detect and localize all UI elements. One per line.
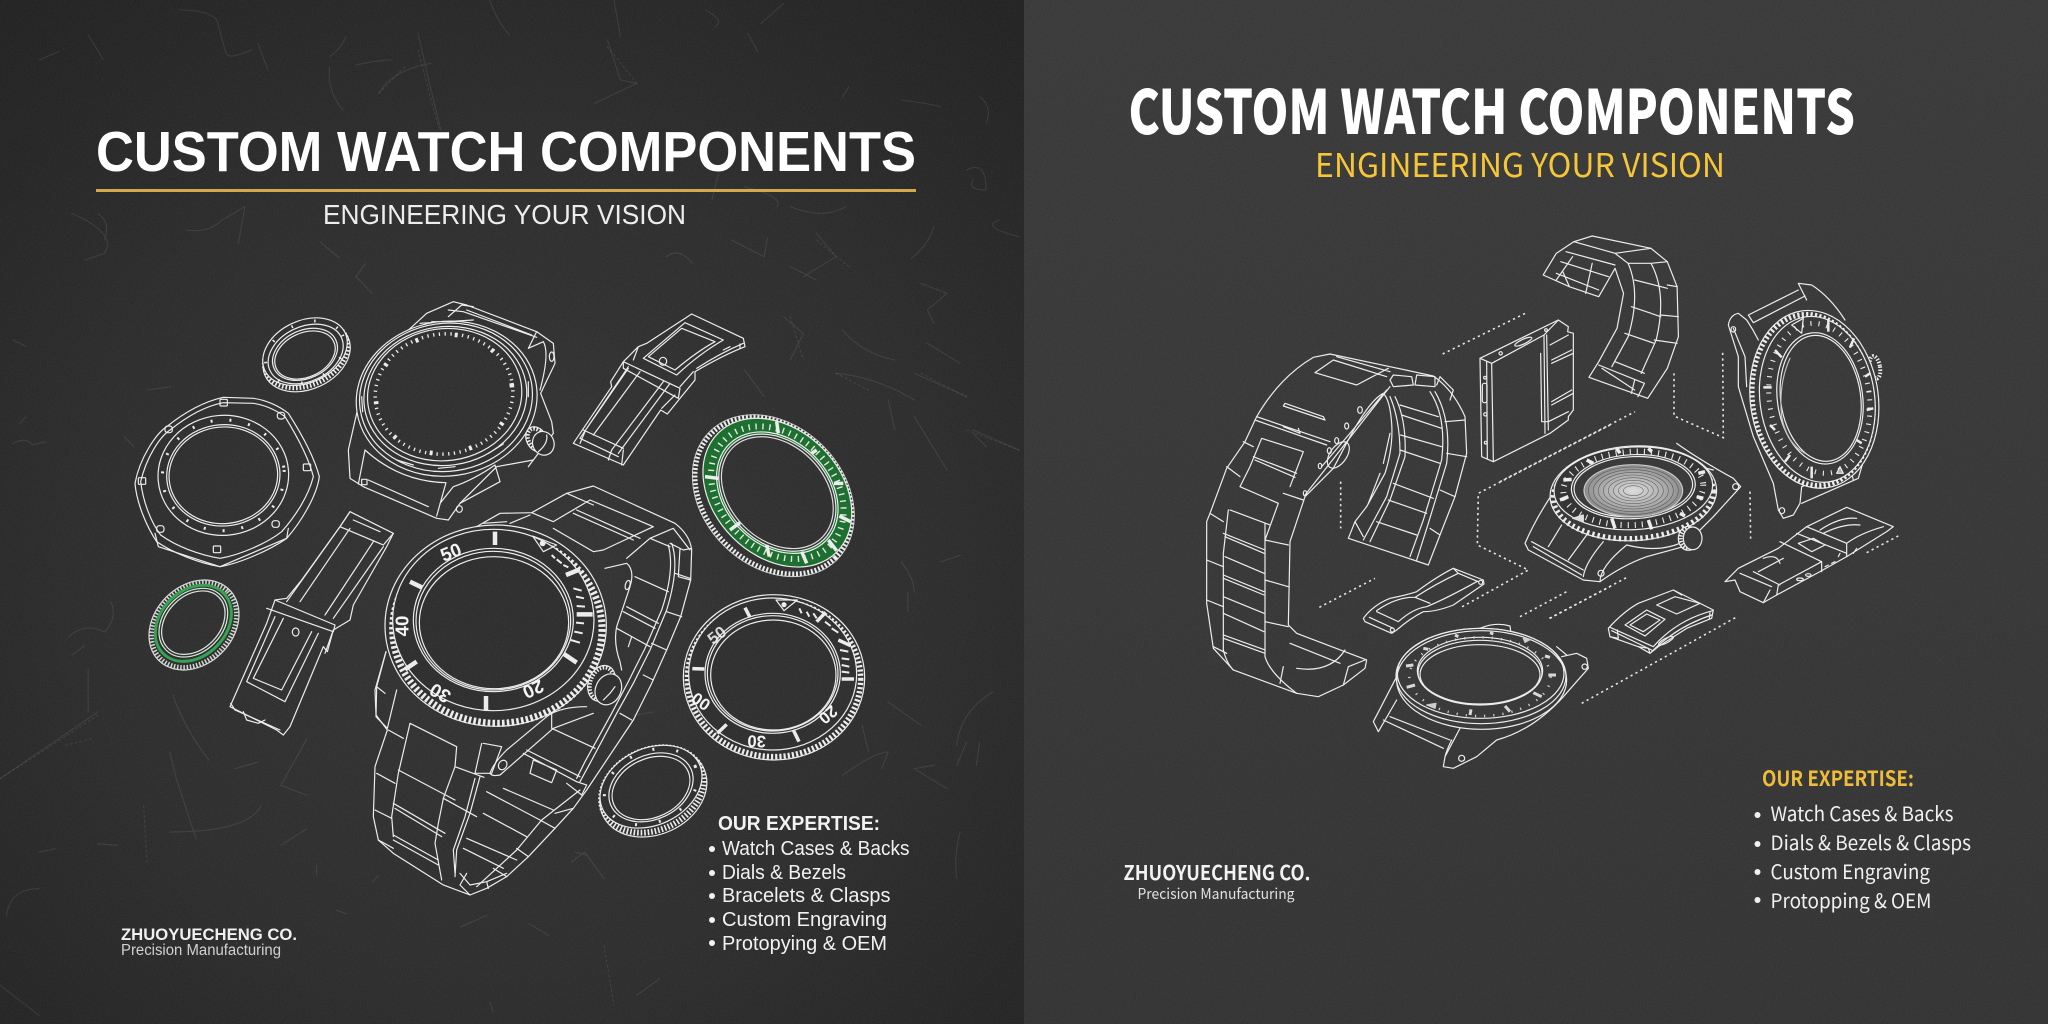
expertise items: Protopying & OEM: [722, 933, 887, 955]
component: long folding clasp: [1725, 507, 1893, 603]
expertise items: Watch Cases & Backs: [1770, 798, 1954, 827]
component: watch case with dial: [346, 302, 557, 520]
expertise heading: OUR EXPERTISE:: [718, 812, 880, 835]
component: right bezel with numerals: 30: [747, 731, 766, 751]
component: small green bezel: [131, 562, 257, 688]
left background: [0, 0, 1024, 1024]
panel: right poster: [1024, 0, 2048, 1024]
component: green bezel: [660, 382, 887, 609]
component: small buckle plate: [1608, 590, 1713, 653]
right background: [1024, 0, 2048, 1024]
dashed assembly guide lines: [1319, 313, 1900, 703]
expertise items: Bracelets & Clasps: [722, 885, 890, 907]
gold divider: [96, 189, 916, 192]
component: main assembled watch: 50: [437, 539, 464, 566]
component: right bezel with numerals: [683, 595, 865, 760]
expertise items: Custom Engraving: [1770, 856, 1930, 885]
panel: left poster: [0, 0, 1024, 1024]
component: small bezel top: [252, 305, 362, 405]
company name: ZHUOYUECHENG CO.: [121, 925, 297, 944]
title: CUSTOM WATCH COMPONENTS: [1128, 63, 1855, 152]
component: right bezel with numerals: 00: [688, 688, 714, 714]
component: center watch with radial back: [1525, 442, 1741, 582]
component: large bracelet: [1207, 354, 1467, 697]
component: octagonal case ring: [135, 397, 319, 567]
component: folding clasp plate: [1480, 320, 1573, 462]
company block: [121, 925, 297, 959]
component: main assembled watch: 40: [391, 616, 412, 636]
subtitle: ENGINEERING YOUR VISION: [1315, 139, 1725, 187]
company tagline: Precision Manufacturing: [1138, 883, 1295, 904]
component: open case bottom watch: [1373, 624, 1588, 768]
component: upper bracelet segment: [1543, 236, 1678, 398]
chalk scratches lower half: [0, 555, 993, 1015]
component: lower strap: [230, 512, 393, 735]
title: CUSTOM WATCH COMPONENTS: [96, 120, 916, 184]
expertise items: [1754, 798, 1971, 914]
component: right bezel with numerals: 50: [704, 622, 730, 649]
expertise items: [709, 838, 910, 955]
component: upper strap: [573, 314, 745, 465]
expertise items: Protopping & OEM: [1770, 885, 1932, 914]
component: main assembled watch: [373, 486, 692, 895]
component: wavy strap link: [1363, 568, 1484, 633]
component: small bezel lower: [585, 729, 722, 854]
company block: [1124, 857, 1310, 904]
expertise items: Custom Engraving: [722, 909, 887, 931]
component: main assembled watch: 20: [519, 675, 547, 703]
our expertise list: [709, 812, 910, 955]
company tagline: Precision Manufacturing: [121, 942, 281, 959]
component: right bezel with numerals: 20: [815, 701, 841, 728]
expertise items: Dials & Bezels & Clasps: [1770, 827, 1971, 856]
chalk scratches texture: [13, 0, 1019, 470]
expertise items: Dials & Bezels: [722, 862, 846, 884]
expertise items: Watch Cases & Backs: [722, 838, 910, 860]
subtitle: ENGINEERING YOUR VISION: [323, 199, 686, 230]
expertise heading: OUR EXPERTISE:: [1762, 763, 1914, 793]
company name: ZHUOYUECHENG CO.: [1124, 857, 1310, 886]
expertise list: [1754, 763, 1971, 914]
component: main assembled watch: 30: [426, 679, 454, 707]
component: side view watch: [1728, 283, 1890, 518]
